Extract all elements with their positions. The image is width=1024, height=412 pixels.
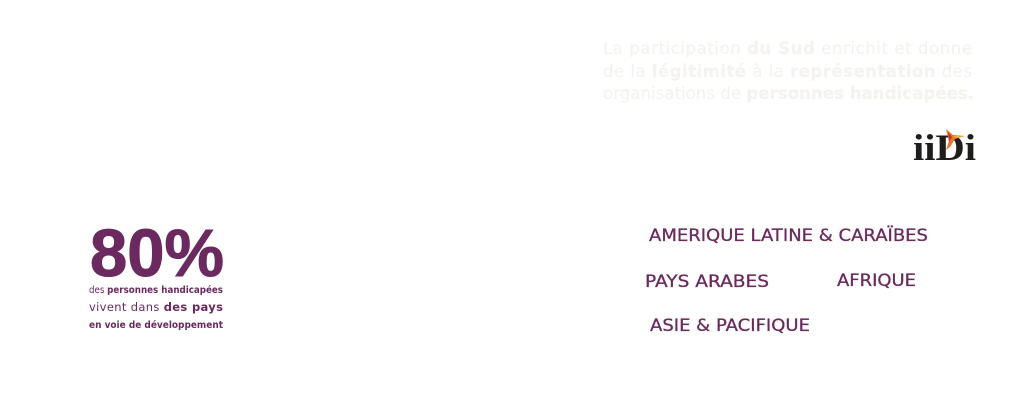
statistic caption: des personnes handicapées bbox=[89, 284, 223, 296]
quote: participation du Sud bbox=[603, 39, 974, 103]
quote: participation du Sud: La participation du Sud enrichit et donne bbox=[603, 39, 972, 58]
region: Amérique latine et Caraïbes: AMERIQUE LATINE & CARAÏBES bbox=[649, 225, 928, 246]
logo: iiDi bbox=[913, 128, 976, 169]
region: Pays arabes: PAYS ARABES bbox=[645, 272, 769, 292]
region: Afrique: AFRIQUE bbox=[837, 271, 916, 291]
statistic caption: en voie de développement bbox=[89, 319, 223, 331]
statistic caption bbox=[89, 284, 223, 331]
big number: 80% bbox=[90, 216, 224, 291]
logo wordmark: iiDi bbox=[913, 128, 976, 169]
statistic caption: vivent dans des pays bbox=[89, 300, 223, 314]
icon: hummingbird bbox=[946, 129, 965, 150]
quote: participation du Sud: organisations de personnes handicapées. bbox=[603, 84, 974, 103]
quote: participation du Sud: de la légitimité à la représentation des bbox=[603, 62, 972, 81]
statistic: 80% bbox=[89, 216, 224, 331]
region: Asie et Pacifique: ASIE & PACIFIQUE bbox=[650, 316, 810, 336]
regions list bbox=[645, 225, 928, 336]
